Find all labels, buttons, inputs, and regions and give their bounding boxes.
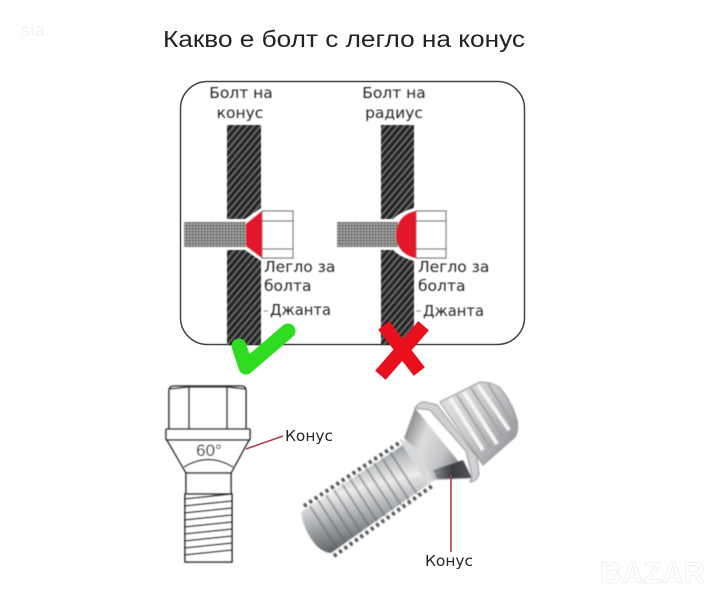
red radius seat — [396, 211, 416, 258]
title: Какво е болт с легло на конус — [163, 26, 525, 52]
panel: radius seat bolt — [337, 84, 489, 345]
thread body — [301, 445, 430, 553]
panel: cone seat bolt — [184, 84, 335, 345]
watermark: sia: sia — [21, 21, 45, 41]
bolt head — [169, 386, 246, 429]
wheel rim section — [227, 125, 261, 345]
callout: cone label left: Конус — [285, 427, 333, 445]
flange — [415, 402, 479, 482]
red conical seat — [246, 211, 262, 258]
cone — [167, 440, 249, 473]
watermark: bazar: BAZAR — [600, 557, 705, 590]
callout: cone label right: Конус — [425, 552, 473, 570]
seat label: Легло за — [264, 258, 335, 276]
technical drawing: bolt with 60 degree cone — [166, 386, 250, 562]
heading: cone bolt: Болт на — [209, 84, 273, 102]
callout: cone label right — [425, 475, 473, 570]
bolt head outline — [262, 211, 293, 258]
seat label: болта — [418, 277, 465, 295]
heading: cone bolt: конус — [217, 104, 263, 122]
bolt shank thread — [337, 222, 398, 247]
heading: radius bolt: Болт на — [362, 84, 426, 102]
angle label: 60° — [196, 441, 222, 460]
neck — [401, 437, 437, 485]
seat label: болта — [264, 277, 311, 295]
heading: radius bolt: радиус — [365, 104, 423, 122]
callout: cone label left — [246, 427, 333, 449]
seat label: Легло за — [418, 258, 489, 276]
bolt shank thread — [184, 222, 246, 247]
bolt head outline — [416, 211, 446, 258]
head — [440, 382, 518, 465]
shank — [186, 473, 231, 494]
photo: 3D bolt — [301, 382, 518, 556]
rim label: Джанта — [423, 302, 484, 320]
thread — [185, 494, 232, 562]
cone — [404, 408, 472, 480]
flange — [166, 429, 250, 440]
rim label: Джанта — [270, 301, 331, 319]
wheel rim section — [381, 125, 414, 345]
icon: red cross — [385, 331, 419, 370]
icon: green check — [239, 331, 288, 367]
panel: comparison frame — [180, 82, 524, 344]
